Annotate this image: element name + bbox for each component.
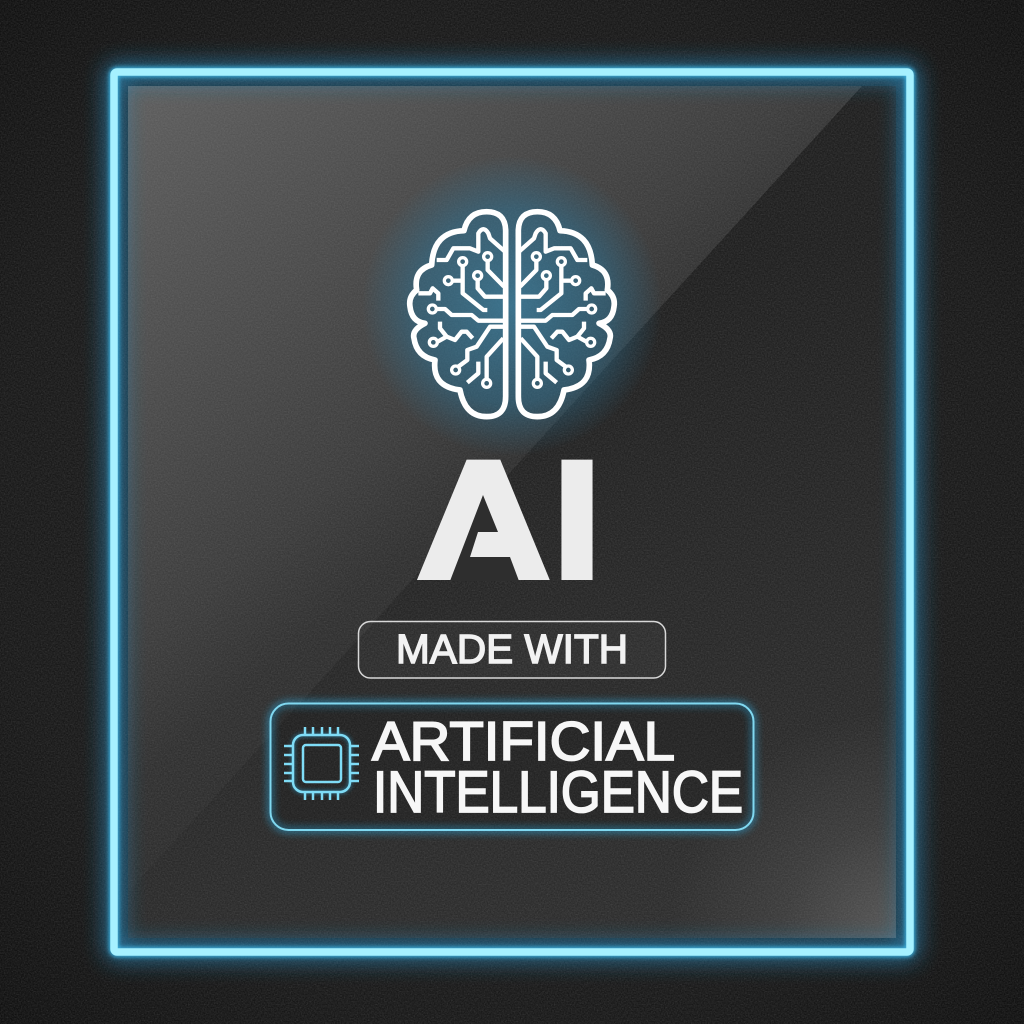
badge: artificial intelligence: [270, 704, 754, 830]
glass panel: [114, 72, 910, 952]
icon: microchip: [284, 727, 359, 800]
badge: made with: MADE WITH: [396, 626, 628, 672]
neon frame border: [114, 72, 910, 952]
text: artificial intelligence: INTELLIGENCE: [373, 760, 743, 825]
text: artificial intelligence: ARTIFICIAL: [372, 710, 675, 772]
text: artificial intelligence: [372, 710, 743, 825]
badge: made with: [358, 622, 666, 678]
title: AI: A: [412, 423, 555, 618]
title: AI: I: [547, 423, 607, 618]
icon: circuit brain: [362, 156, 662, 456]
neon frame glow: [114, 72, 910, 952]
title: AI: [412, 423, 607, 618]
